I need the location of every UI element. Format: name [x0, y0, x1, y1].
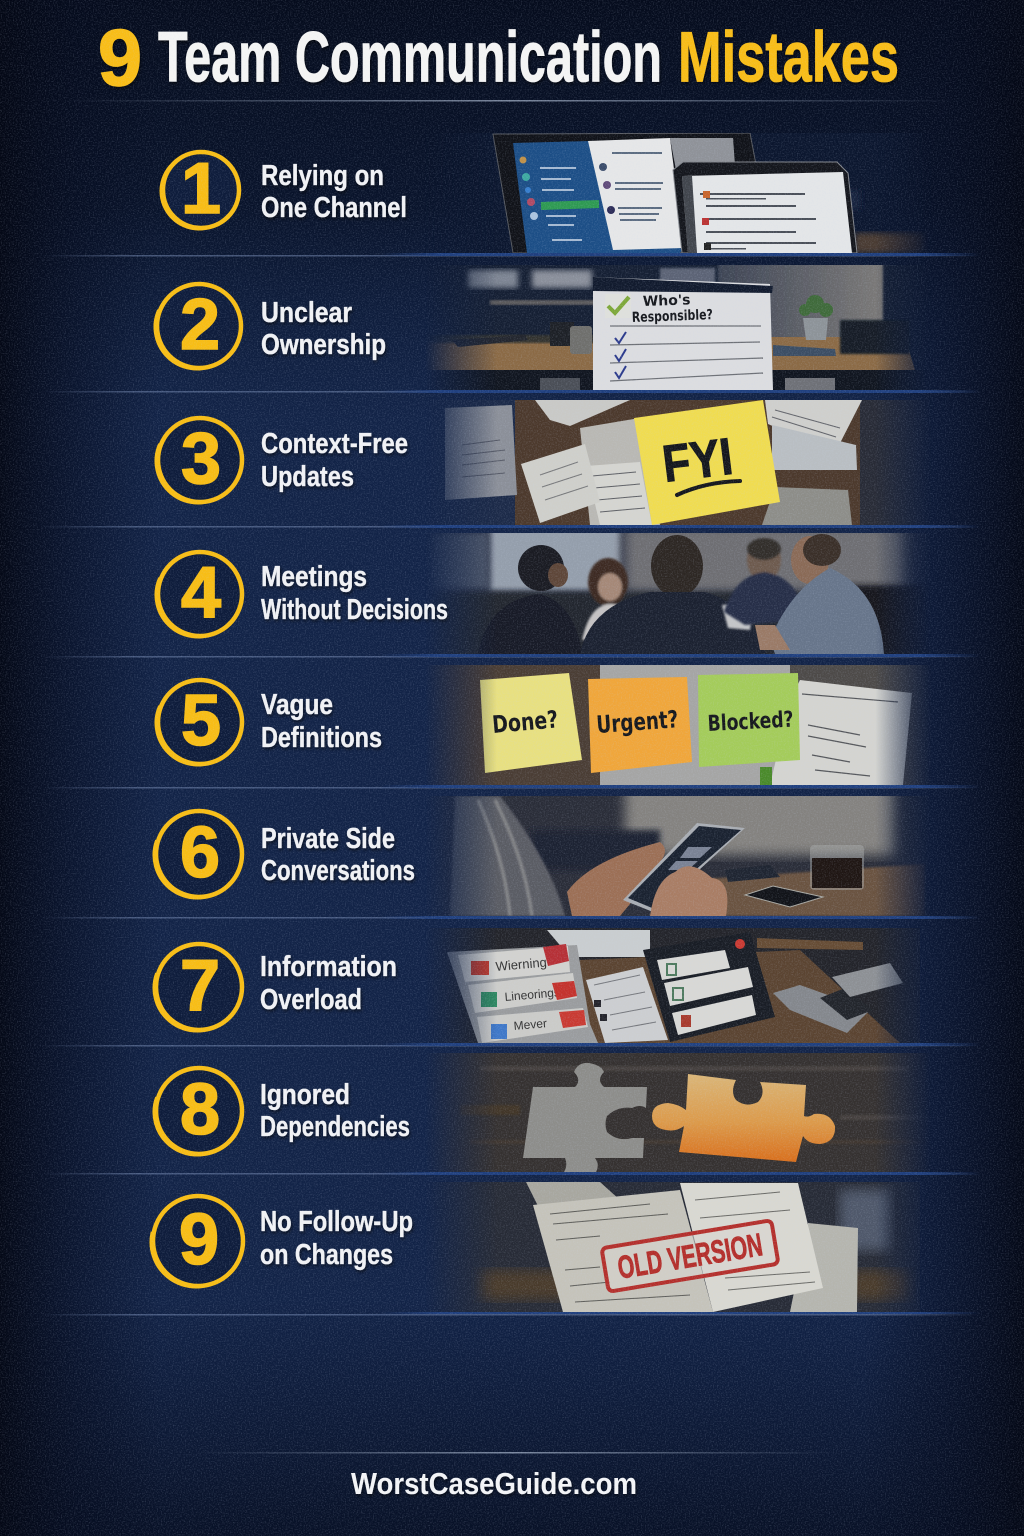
- item 1: [145, 137, 407, 245]
- item 2: [138, 268, 386, 386]
- checklist card: Responsible?: [632, 307, 713, 326]
- item 2: 2: [180, 285, 220, 365]
- keyboard calculator: [773, 963, 903, 1033]
- phone: [623, 823, 745, 912]
- item 3: 3: [181, 419, 221, 499]
- item 8: Ignored: [260, 1079, 350, 1111]
- footer source: WorstCaseGuide.com: [351, 1466, 637, 1501]
- sticky note: Urgent?: [588, 677, 692, 773]
- sticky note: Blocked?: Blocked?: [707, 708, 794, 737]
- item 4: [139, 536, 448, 654]
- paper list: [586, 967, 668, 1043]
- item 6: [136, 794, 415, 916]
- notification card: upcoming: [468, 973, 577, 1013]
- man right front: [755, 534, 884, 654]
- row 8 image: two disconnected puzzle pieces on wood: [443, 1053, 924, 1172]
- item 1: Relying on: [261, 160, 384, 192]
- plant: [799, 295, 833, 340]
- item 5: Vague: [261, 689, 333, 721]
- item 8: Dependencies: [260, 1111, 410, 1143]
- item 8: 8: [180, 1070, 220, 1150]
- woman center: [580, 556, 630, 642]
- item 6: 6: [180, 813, 220, 893]
- older document sheet: [533, 1190, 713, 1312]
- gray puzzle piece: [523, 1063, 647, 1172]
- item 5: 5: [181, 681, 221, 761]
- title: Mistakes: [678, 18, 899, 98]
- row separators: [40, 253, 980, 1316]
- notification card: warning: Wierning: [495, 955, 547, 974]
- coffee glass: [810, 845, 864, 890]
- sticky note: Done?: Done?: [491, 705, 559, 739]
- item 2: Unclear: [261, 297, 352, 329]
- old version stamp: OLD VERSION: [615, 1226, 765, 1286]
- row 3 image: messy papers with FYI sticky note: [420, 400, 940, 525]
- item 6: Private Side: [261, 823, 395, 855]
- row 7 image: notification cards and tablet: [420, 928, 920, 1043]
- item 5: Definitions: [261, 722, 382, 754]
- item 3: [139, 402, 408, 520]
- man from back: [580, 535, 718, 654]
- item 5: [139, 664, 382, 782]
- orange puzzle piece: [652, 1074, 835, 1162]
- title: Team Communication: [158, 18, 662, 98]
- item 9: 9: [179, 1200, 219, 1280]
- sticky note: Done?: [480, 673, 582, 773]
- paper: [722, 602, 754, 630]
- item 7: Overload: [260, 984, 362, 1016]
- FYI sticky note: FYI: [659, 428, 736, 494]
- item 9: on Changes: [260, 1239, 393, 1271]
- row 1 image: laptop and tablet with chat apps: [492, 133, 922, 253]
- item 1: One Channel: [261, 192, 407, 224]
- item 8: [136, 1051, 410, 1173]
- item 6: Conversations: [261, 855, 415, 887]
- notification card: warning: [458, 944, 570, 982]
- FYI sticky note: [634, 400, 780, 525]
- item 4: Meetings: [261, 561, 367, 593]
- sticky note: Urgent?: Urgent?: [595, 705, 679, 739]
- tablet: [643, 932, 775, 1042]
- title: 9: [98, 13, 142, 102]
- sticky note: Blocked?: [698, 673, 800, 767]
- old version stamp: [602, 1220, 778, 1292]
- item 1: 1: [181, 149, 221, 229]
- right hand: [650, 866, 727, 916]
- item 3: Updates: [261, 461, 354, 493]
- shirt: [450, 796, 565, 916]
- row 9 image: papers with old version stamp: [420, 1182, 920, 1312]
- item 7: [136, 927, 397, 1049]
- person left: [478, 545, 582, 654]
- item 7: 7: [180, 946, 220, 1026]
- checklist card: [593, 277, 773, 390]
- row 5 image: three question sticky notes: [420, 665, 940, 785]
- item 9: [133, 1179, 413, 1305]
- notification card: meeting: Mever: [513, 1016, 547, 1033]
- man right back: [724, 538, 805, 625]
- row 4 image: meeting with people around a table: [436, 533, 917, 654]
- checklist card: Who's: [643, 292, 691, 310]
- row 2 image: office desk with who's responsible checklist: [430, 265, 915, 390]
- small phone on table: [745, 886, 823, 907]
- item 4: Without Decisions: [261, 594, 448, 626]
- left hand: [567, 842, 665, 916]
- item 3: Context-Free: [261, 428, 408, 460]
- notification card: upcoming: Lineorings: [504, 985, 560, 1004]
- item 7: Information: [260, 951, 397, 983]
- item 4: 4: [181, 553, 221, 633]
- item 2: Ownership: [261, 329, 386, 361]
- newer document sheet: [680, 1183, 823, 1312]
- item 9: No Follow-Up: [260, 1206, 413, 1238]
- row 6 image: hands holding a phone at a table: [448, 796, 924, 916]
- notification card: meeting: [477, 1008, 588, 1043]
